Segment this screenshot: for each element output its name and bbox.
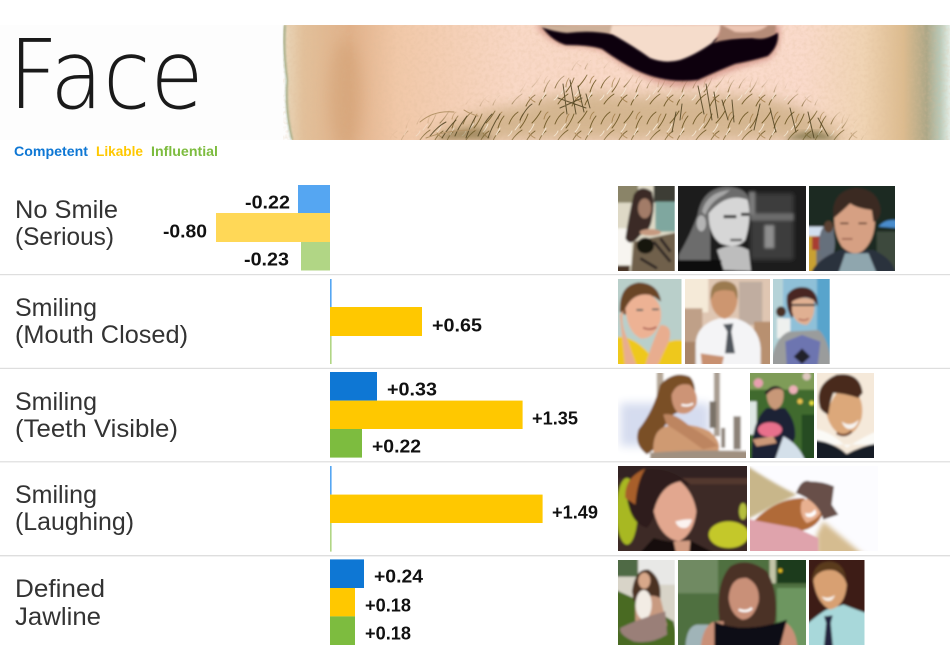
value: +0.65 — [432, 314, 482, 336]
photo: woman with glasses — [773, 279, 830, 364]
values: +1.35 — [532, 408, 578, 428]
photo: woman hands on face — [618, 279, 682, 364]
values: -0.23 — [244, 248, 289, 270]
row label: (Serious) — [15, 223, 114, 251]
photo: laughing woman in cowboy hat — [750, 466, 864, 551]
photo: smiling woman with curly hair — [618, 373, 746, 458]
row label — [15, 196, 118, 251]
values — [163, 192, 290, 270]
value: +1.49 — [552, 502, 598, 522]
row: Smiling (Teeth Visible) — [15, 366, 881, 465]
photo: smiling man with tie — [809, 560, 864, 645]
bars — [330, 559, 364, 645]
row label: (Mouth Closed) — [15, 321, 188, 349]
legend: Competent — [14, 143, 88, 159]
row label — [15, 575, 105, 631]
photo: woman with camera — [618, 186, 675, 271]
row label: (Teeth Visible) — [15, 415, 178, 443]
values — [365, 566, 424, 644]
photo: man reading book — [817, 373, 874, 458]
row label: (Laughing) — [15, 508, 134, 536]
bars — [330, 372, 523, 458]
values: +0.22 — [372, 436, 421, 456]
row label — [15, 388, 178, 443]
row: Defined Jawline — [15, 553, 871, 647]
values: -0.80 — [163, 220, 207, 242]
row label — [15, 294, 188, 349]
bars — [330, 279, 422, 364]
values: +0.18 — [365, 594, 411, 616]
photo: smiling woman in garden — [678, 560, 806, 645]
photo: man with tie — [685, 279, 770, 364]
bars — [330, 466, 543, 552]
values: -0.22 — [245, 192, 290, 212]
row label: Defined — [15, 575, 105, 603]
values: +0.18 — [365, 622, 411, 644]
legend: Likable — [96, 143, 143, 159]
row label: Smiling — [15, 388, 97, 416]
row: Smiling (Laughing) — [15, 459, 883, 558]
values: +0.24 — [374, 566, 424, 586]
row label: Smiling — [15, 294, 97, 322]
row label — [15, 481, 134, 536]
photo: serious woman black and white — [678, 186, 806, 271]
values: +0.33 — [387, 378, 437, 400]
row: Smiling (Mouth Closed) — [15, 272, 836, 371]
legend — [14, 143, 218, 159]
bars — [216, 185, 330, 270]
legend: Influential — [151, 143, 218, 159]
banner image: mouth close-up — [282, 25, 950, 140]
row label: No Smile — [15, 196, 118, 224]
photo: laughing woman — [618, 466, 747, 551]
row label: Jawline — [15, 603, 101, 631]
photo: serious man outdoors — [809, 186, 895, 271]
row label: Smiling — [15, 481, 97, 509]
title: Face — [8, 19, 204, 131]
photo: woman with dog — [618, 560, 675, 645]
photo: woman with flowers in garden — [750, 373, 814, 458]
values — [372, 378, 578, 456]
row: No Smile (Serious) — [15, 179, 903, 278]
